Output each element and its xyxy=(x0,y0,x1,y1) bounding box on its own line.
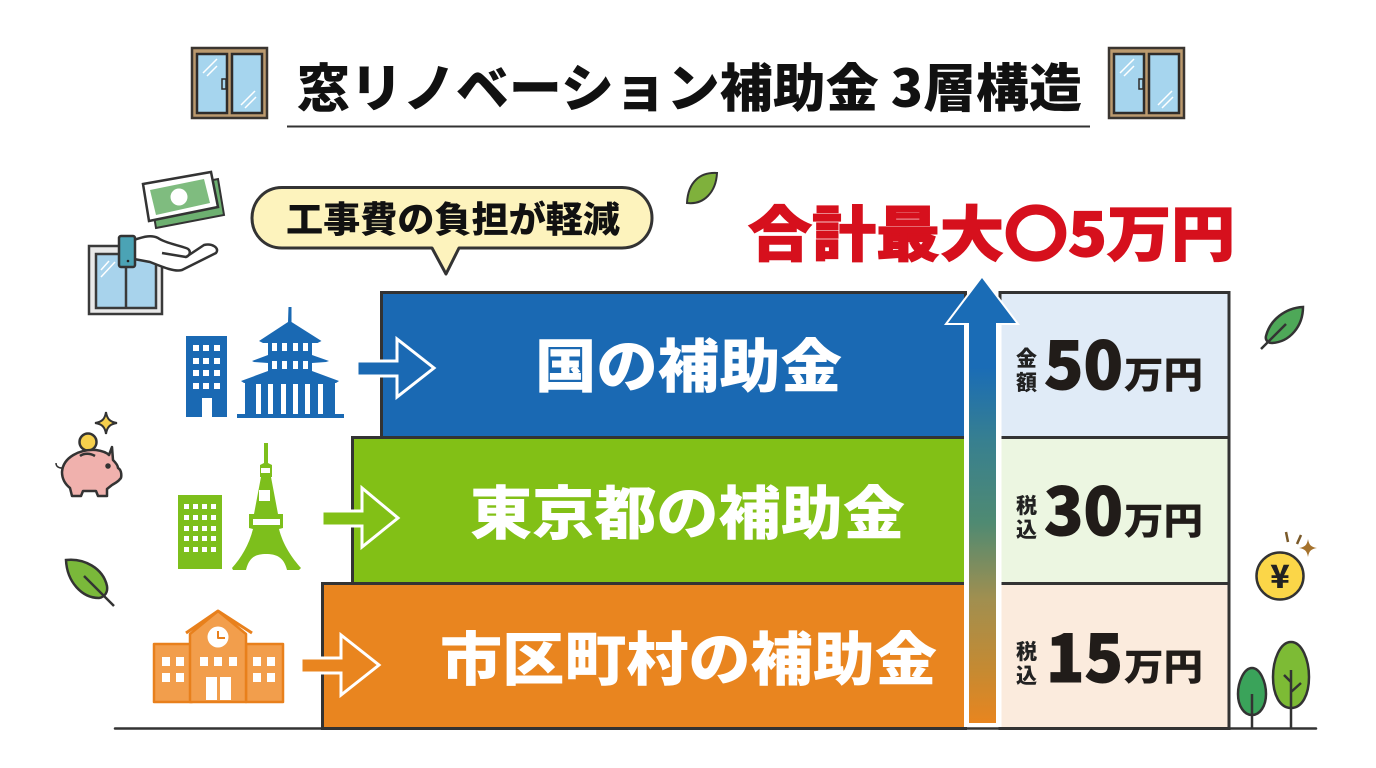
leaf: right xyxy=(1261,307,1303,349)
tier: Tokyo subsidy xyxy=(352,438,966,584)
amount cell: 15: 15 xyxy=(1046,607,1123,701)
amount cell: 30 xyxy=(1000,438,1229,584)
icon: window right xyxy=(1109,48,1184,118)
arrow: Tokyo xyxy=(322,488,398,547)
icon: yen coin: ¥ xyxy=(1270,552,1290,598)
icon: trees xyxy=(1238,642,1309,728)
amount cell: 50: 額 xyxy=(1016,367,1037,397)
tier: municipal subsidy: 市区町村の補助金 xyxy=(440,613,937,697)
ground line xyxy=(115,727,1316,730)
amount cell: 50: 50 xyxy=(1044,314,1123,408)
leaf: top center xyxy=(687,173,717,203)
amount cell: 30: 30 xyxy=(1044,460,1123,554)
icon: national building xyxy=(186,307,344,418)
icon: banknotes xyxy=(143,172,224,228)
amount cell: 15: 税 xyxy=(1016,636,1037,666)
amount cell: 30: 税 xyxy=(1016,490,1037,520)
icon: sparkle near piggy bank xyxy=(95,412,117,434)
amount cell: 15: 込 xyxy=(1016,660,1037,690)
icon: municipal building xyxy=(154,611,283,702)
leaf: left xyxy=(66,560,114,606)
tier: Tokyo subsidy: 東京都の補助金 xyxy=(470,467,905,551)
icon: window left xyxy=(192,48,267,118)
amount cell: 50: 金 xyxy=(1016,343,1037,373)
amount cell: 30: 込 xyxy=(1016,514,1037,544)
icon: Tokyo building and tower xyxy=(178,443,301,570)
amount cell: 30: 万円 xyxy=(1124,491,1203,545)
tier: municipal subsidy xyxy=(322,584,966,728)
icon: piggy bank xyxy=(56,434,121,496)
icon: hand over window xyxy=(89,236,217,314)
tier: national subsidy: 国の補助金 xyxy=(535,320,842,404)
arrow: national xyxy=(357,339,434,397)
speech bubble: 工事費の負担が軽減 xyxy=(286,191,620,243)
amount cell: 15 xyxy=(1000,584,1229,728)
amount cell: 50 xyxy=(1000,292,1229,438)
total amount heading: 合計最大〇5万円 xyxy=(748,187,1235,274)
arrow: municipal xyxy=(301,635,379,695)
icon: yen coin xyxy=(1256,532,1317,600)
tier: national subsidy xyxy=(382,292,966,438)
speech bubble xyxy=(252,188,652,274)
amount cell: 15: 万円 xyxy=(1124,637,1203,691)
title: 窓リノベーション補助金 3層構造 xyxy=(297,47,1082,122)
arrow: rising total xyxy=(948,278,1016,727)
amount cell: 50: 万円 xyxy=(1124,345,1203,399)
